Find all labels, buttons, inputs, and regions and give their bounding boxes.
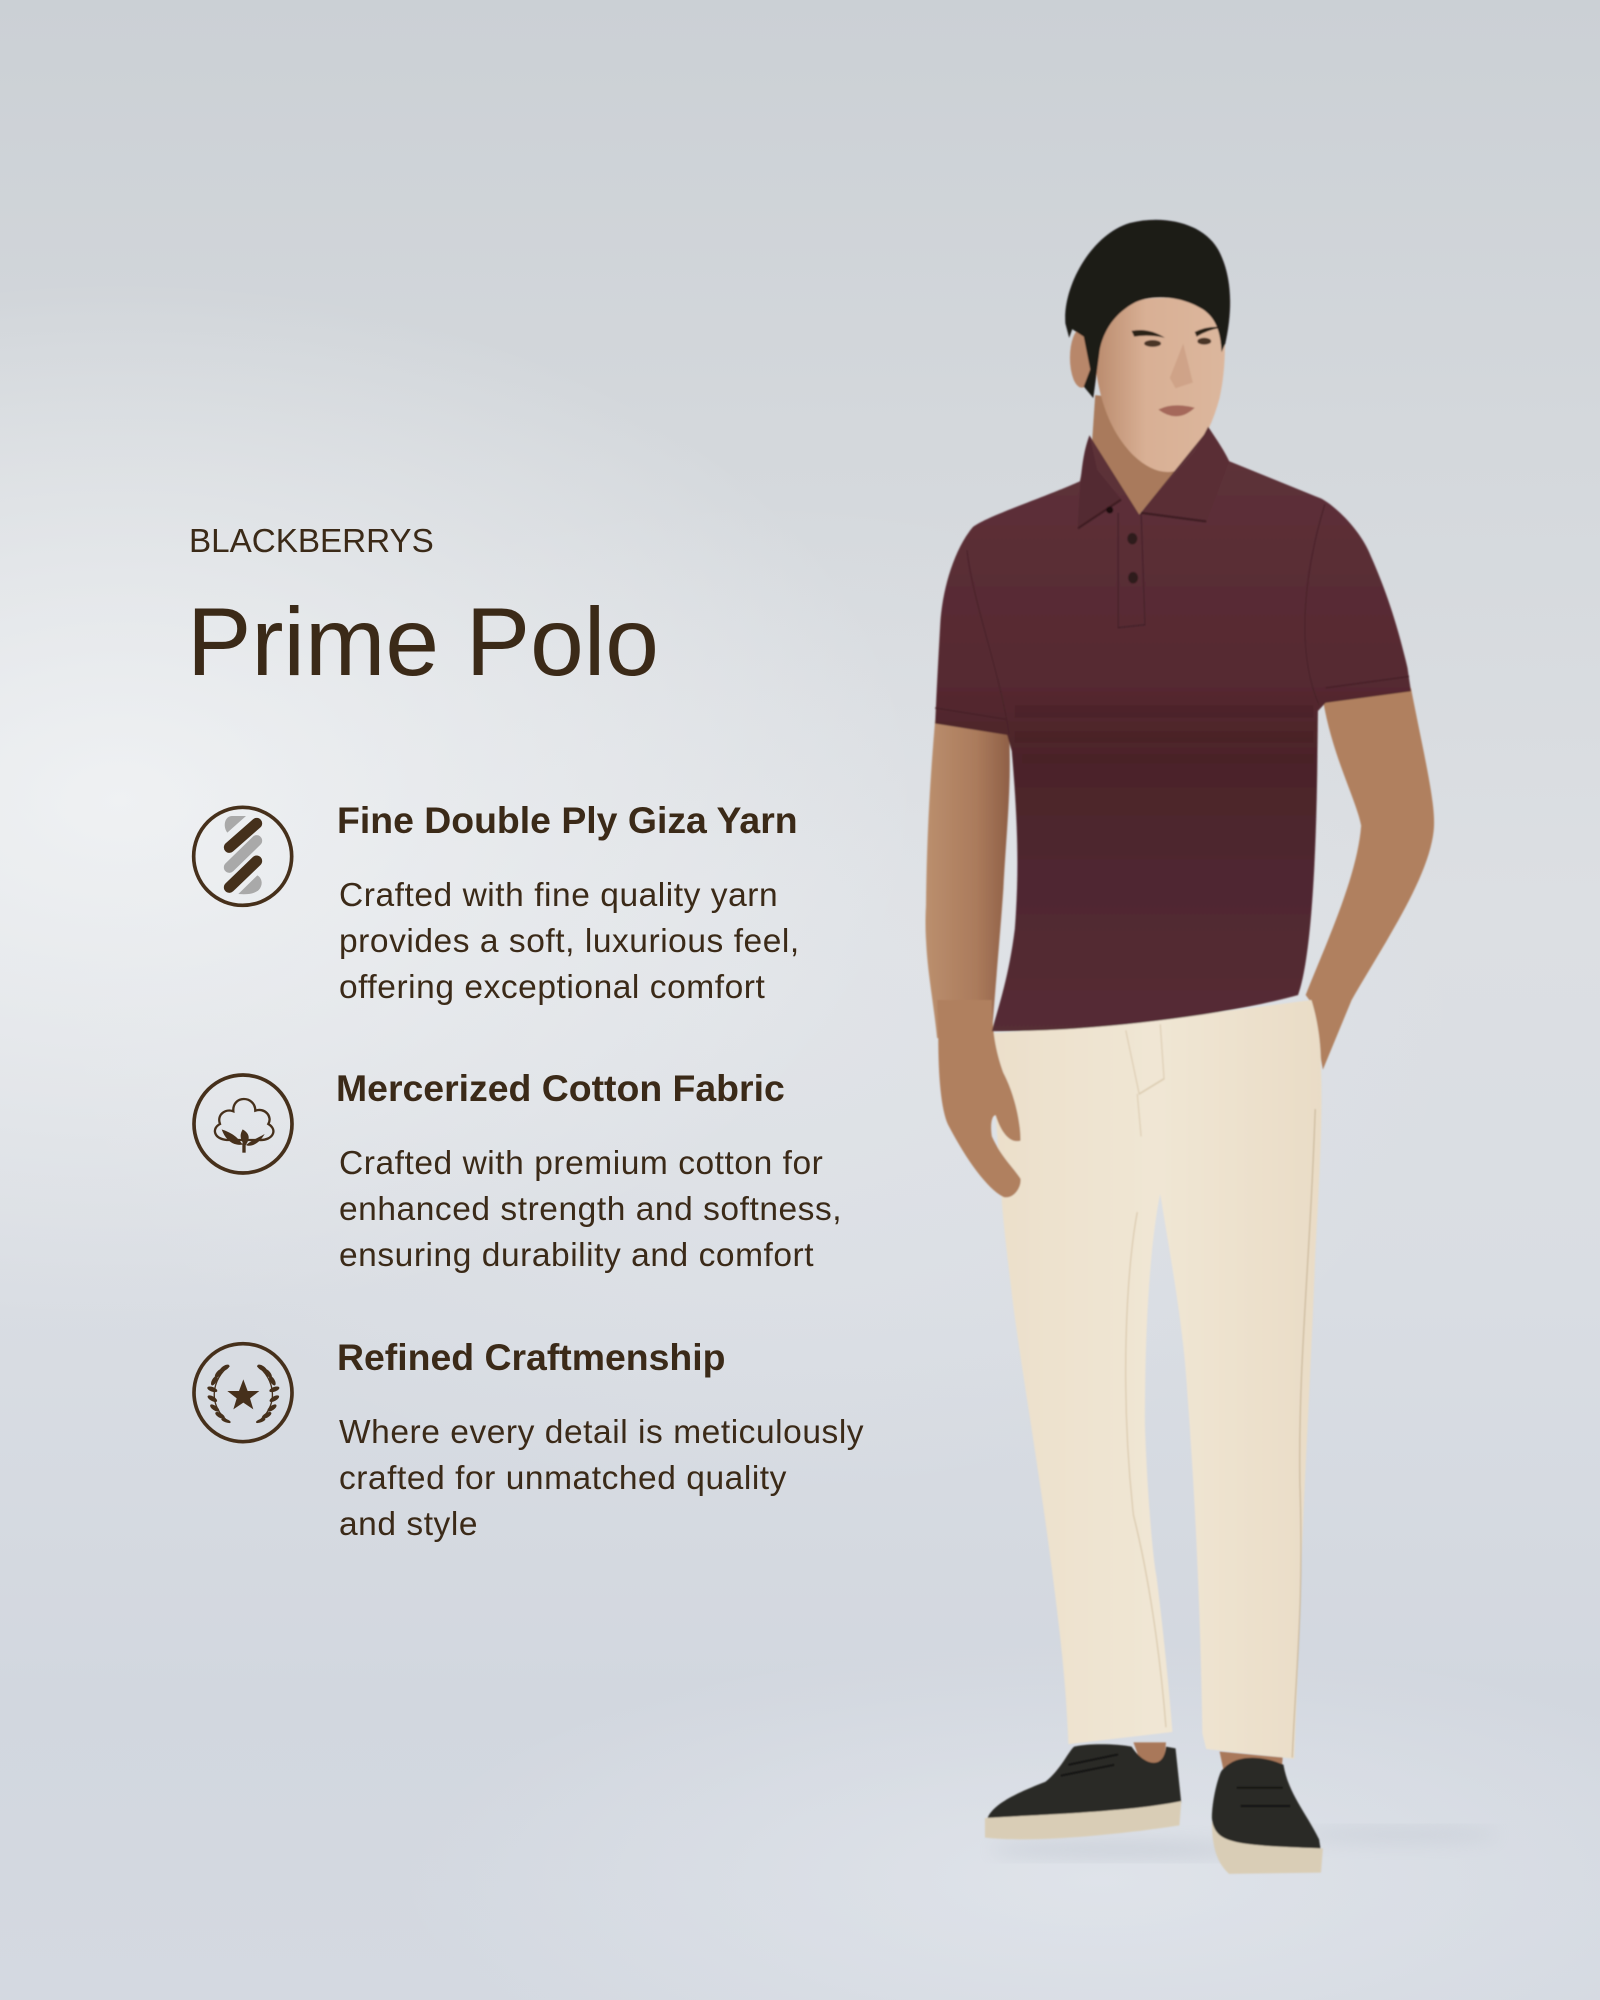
polo shirt and head bbox=[935, 220, 1411, 1031]
buttons bbox=[1127, 533, 1137, 544]
left shoe bbox=[985, 1742, 1181, 1839]
feature: cotton bbox=[192, 1067, 842, 1274]
placket bbox=[1118, 513, 1145, 628]
hand bbox=[937, 1000, 1021, 1197]
heading: Mercerized Cotton Fabric bbox=[336, 1067, 785, 1109]
shirt horizontal tonal bands bbox=[1015, 705, 1313, 763]
shirt seams bbox=[935, 504, 1409, 734]
trouser seams and folds bbox=[1126, 1024, 1315, 1758]
icon: star with laurel bbox=[192, 1342, 294, 1444]
feature: fine yarn bbox=[192, 799, 800, 1006]
feature: craftsmanship bbox=[192, 1336, 864, 1543]
description: offering exceptional comfort bbox=[339, 969, 765, 1006]
left arm bbox=[926, 719, 1010, 1038]
icon: twisted yarn bbox=[192, 806, 294, 908]
shirt body bbox=[935, 430, 1411, 1031]
description bbox=[339, 877, 800, 1006]
description: Where every detail is meticulously bbox=[339, 1414, 864, 1451]
main title: Prime Polo bbox=[187, 589, 659, 696]
collar bbox=[1078, 435, 1121, 528]
description bbox=[339, 1145, 842, 1274]
icon: cotton boll bbox=[192, 1073, 294, 1175]
description: ensuring durability and comfort bbox=[339, 1237, 814, 1274]
heading: Refined Craftmenship bbox=[337, 1336, 726, 1378]
right arm bbox=[1306, 688, 1434, 1070]
trousers bbox=[990, 1000, 1321, 1759]
right shoe bbox=[1212, 1751, 1323, 1874]
description: crafted for unmatched quality bbox=[339, 1460, 787, 1497]
head bbox=[1065, 220, 1230, 515]
description: and style bbox=[339, 1506, 478, 1543]
description bbox=[339, 1414, 864, 1543]
description: provides a soft, luxurious feel, bbox=[339, 923, 800, 960]
description: Crafted with fine quality yarn bbox=[339, 877, 778, 914]
heading: Fine Double Ply Giza Yarn bbox=[337, 799, 798, 841]
description: enhanced strength and softness, bbox=[339, 1191, 842, 1228]
brand name: BLACKBERRYS bbox=[189, 523, 434, 560]
model figure bbox=[926, 220, 1434, 1874]
floor shadow bbox=[990, 1827, 1500, 1860]
description: Crafted with premium cotton for bbox=[339, 1145, 823, 1182]
